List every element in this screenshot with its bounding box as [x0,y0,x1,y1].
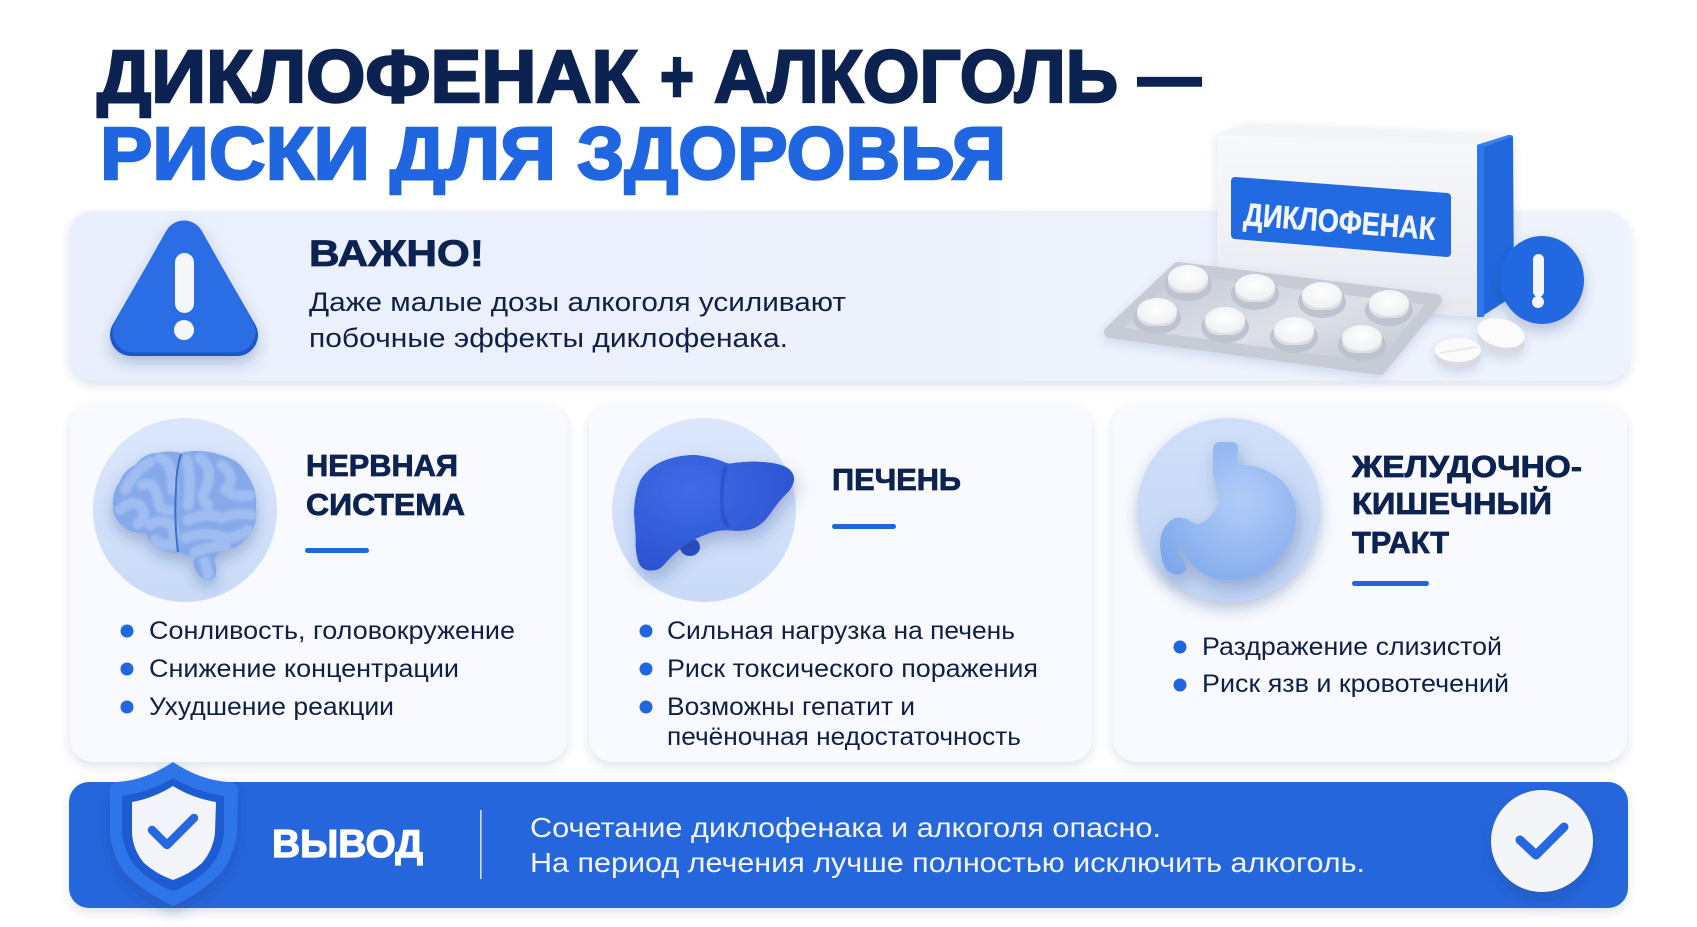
text block: conclusion message: На период лечения лучше полностью исключить алкоголь. [530,847,1365,878]
icon: warning triangle [131,241,237,340]
panel: important warning [69,211,1630,381]
heading: liver: ПЕЧЕНЬ [832,462,961,497]
list: nervous system effects [120,617,515,721]
list: gastrointestinal effects: Раздражение слизистой [1202,633,1502,661]
icon: exclamation badge [1500,236,1584,324]
heading: conclusion: ВЫВОД [272,823,423,866]
panel: liver [589,404,1092,762]
text block: important message [309,287,846,353]
list: nervous system effects: Снижение концентрации [149,655,459,683]
medicine box [1217,125,1514,317]
list: liver effects: Сильная нагрузка на печень [667,617,1015,645]
text block: important message: Даже малые дозы алкоголя усиливают [309,287,846,317]
list: liver effects [640,617,1038,751]
title [97,35,1201,195]
icon: check mark button [1491,790,1593,892]
list: gastrointestinal effects [1174,633,1509,698]
list: gastrointestinal effects: Риск язв и кровотечений [1202,670,1509,698]
list: nervous system effects: Сонливость, головокружение [149,617,515,645]
heading: nervous system: СИСТЕМА [306,487,465,522]
icon: liver [612,418,796,602]
text block: conclusion message [530,812,1365,878]
panel: conclusion banner [69,762,1628,908]
heading: nervous system: НЕРВНАЯ [306,448,458,483]
list: liver effects: печёночная недостаточность [667,723,1021,751]
loose pills [1435,314,1528,369]
title: АЛКОГОЛЬ [714,35,1118,118]
heading: important: ВАЖНО! [309,233,484,274]
text block: conclusion message: Сочетание диклофенака и алкоголя опасно. [530,812,1161,843]
title: ДИКЛОФЕНАК [97,35,639,118]
heading: nervous system [306,448,465,522]
icon: stomach [1137,418,1321,602]
panel: gastrointestinal tract [1113,404,1627,762]
heading: gastrointestinal tract [1351,449,1582,560]
blister pack [1110,265,1436,369]
illustration: medicine box and blister [1110,125,1584,369]
text block: important message: побочные эффекты диклофенака. [309,323,788,353]
title: ЗДОРОВЬЯ [577,112,1006,195]
heading: gastrointestinal tract: ЖЕЛУДОЧНО- [1351,449,1582,484]
title: + [660,35,694,118]
title: ДЛЯ [390,112,556,195]
panel: nervous system [70,404,567,762]
heading: gastrointestinal tract: ТРАКТ [1352,525,1449,560]
heading: gastrointestinal tract: КИШЕЧНЫЙ [1352,485,1552,521]
medicine box: ДИКЛОФЕНАК [1242,196,1437,247]
icon: brain [93,418,277,602]
title: — [1138,35,1201,118]
list: liver effects: Риск токсического поражения [667,655,1038,683]
icon: shield [110,762,238,906]
list: nervous system effects: Ухудшение реакции [149,693,394,721]
list: liver effects: Возможны гепатит и [667,693,915,721]
title: РИСКИ [100,112,370,195]
